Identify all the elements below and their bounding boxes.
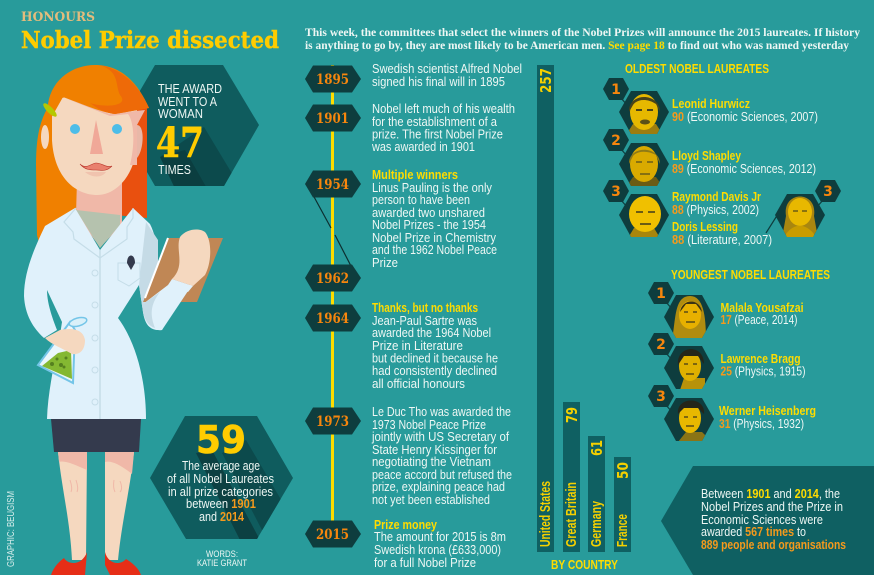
text: multiple winners: Prize bbox=[372, 256, 398, 270]
rank badges: 3 bbox=[656, 389, 666, 405]
bar: Great Britain bbox=[563, 402, 581, 552]
bar: Germany: 61 bbox=[588, 440, 606, 456]
rank badges: 2 bbox=[611, 133, 621, 149]
text: prize money: The amount for 2015 is 8m bbox=[374, 530, 506, 544]
text: thanks but no thanks: but declined it because he bbox=[372, 352, 498, 366]
text: 1973: State Henry Kissinger for bbox=[372, 443, 497, 457]
laureate 3 bbox=[619, 194, 669, 238]
text: 1973 bbox=[371, 405, 512, 507]
shoes bbox=[51, 552, 141, 575]
bar: France: 50 bbox=[614, 462, 632, 479]
year 1954: 1954 bbox=[316, 177, 349, 193]
text: 1901: prize. The first Nobel Prize bbox=[372, 128, 503, 142]
laureate 3 bbox=[664, 398, 714, 442]
bar: United States bbox=[537, 65, 555, 552]
text: prize money: Swedish krona (£633,000) bbox=[374, 543, 501, 557]
hand and forearm bbox=[143, 285, 192, 330]
text: thanks but no thanks: all official honours bbox=[372, 377, 465, 391]
callout: prize totals: 889 people and organisations bbox=[701, 538, 846, 552]
laureate text: 89 (Economic Sciences, 2012) bbox=[672, 162, 816, 176]
text: multiple winners: awarded two unshared bbox=[372, 206, 485, 220]
text: thanks but no thanks: Thanks, but no thanks bbox=[372, 301, 478, 315]
clipboard bbox=[143, 238, 223, 302]
year 1895 bbox=[305, 66, 361, 92]
text: 1895: signed his final will in 1895 bbox=[372, 75, 505, 89]
rank badges: 1 bbox=[611, 82, 621, 98]
text: 1973: negotiating the Vietnam bbox=[372, 455, 491, 469]
callout: award went to a woman 47 times: WENT TO A bbox=[158, 95, 218, 109]
laureate text: Lloyd Shapley bbox=[672, 149, 741, 163]
callout: average age 59: of all Nobel Laureates bbox=[167, 472, 274, 486]
bar: Great Britain: Great Britain bbox=[564, 482, 580, 547]
rank badges: 3 bbox=[611, 184, 621, 200]
callout: award went to a woman 47 times: WOMAN bbox=[158, 107, 203, 121]
text: 1973: jointly with US Secretary of bbox=[371, 430, 509, 444]
heading: OLDEST NOBEL LAUREATES bbox=[625, 61, 769, 76]
laureate text: 90 (Economic Sciences, 2007) bbox=[672, 110, 818, 124]
callout: average age 59: between 1901 bbox=[186, 497, 256, 511]
text: multiple winners: person to have been bbox=[372, 193, 470, 207]
laureate text: Werner Heisenberg bbox=[719, 404, 816, 418]
rank badges bbox=[648, 282, 674, 407]
callout: award went to a woman 47 times: TIMES bbox=[158, 163, 191, 177]
callout: award went to a woman 47 times: 47 bbox=[156, 119, 204, 167]
text: 1901: for the establishment of a bbox=[372, 115, 497, 129]
year 1962: 1962 bbox=[316, 271, 349, 287]
text: 1973: not yet been established bbox=[372, 493, 490, 507]
year 1973 bbox=[305, 408, 361, 434]
face bbox=[52, 90, 137, 195]
rank badges bbox=[603, 78, 841, 202]
skirt bbox=[51, 419, 141, 452]
section label: HONOURS bbox=[21, 10, 95, 25]
callout: prize totals: awarded 567 times to bbox=[701, 525, 806, 539]
text: 1895 bbox=[372, 62, 522, 89]
text: 1973: Le Duc Tho was awarded the bbox=[372, 405, 511, 419]
text: multiple winners: Nobel Prizes - the 1954 bbox=[372, 218, 486, 232]
text: thanks but no thanks: Jean-Paul Sartre was bbox=[372, 314, 477, 328]
callout: prize totals: Between 1901 and 2014, the bbox=[701, 487, 840, 501]
intro text: is anything to go by, they are most likely to be American men. See page 18 to find out who was named yesterday bbox=[305, 38, 849, 52]
text: 1901: Nobel left much of his wealth bbox=[372, 102, 515, 116]
laureate 1 bbox=[619, 91, 669, 135]
text: prize money: for a full Nobel Prize bbox=[374, 556, 476, 570]
text: 1973: 1973 Nobel Peace Prize bbox=[372, 418, 486, 432]
words credit: WORDS: bbox=[206, 549, 238, 559]
callout: average age 59: The average age bbox=[182, 459, 260, 473]
year 1954 bbox=[305, 170, 361, 198]
laureate text: 31 (Physics, 1932) bbox=[719, 417, 804, 431]
bar chart: by country bbox=[537, 65, 632, 572]
bar: Germany: Germany bbox=[589, 501, 605, 547]
laureate text: Raymond Davis Jr bbox=[672, 190, 761, 204]
eyes, nose, mouth bbox=[70, 124, 80, 134]
text: multiple winners: Nobel Prize in Chemistry bbox=[372, 231, 497, 245]
year 1962 bbox=[305, 264, 361, 292]
panel: oldest laureates bbox=[603, 61, 841, 247]
bar: United States: United States bbox=[538, 481, 554, 547]
legs bbox=[58, 452, 134, 560]
illustration: scientist woman bbox=[24, 65, 223, 575]
words credit bbox=[197, 549, 247, 568]
callout: award went to a woman 47 times bbox=[140, 65, 259, 186]
laureate text bbox=[672, 97, 818, 247]
neck bbox=[76, 180, 122, 247]
text: thanks but no thanks: had consistently declined bbox=[372, 364, 497, 378]
intro text bbox=[305, 25, 860, 52]
year 1964: 1964 bbox=[316, 311, 349, 327]
rank badges: 2 bbox=[656, 337, 666, 353]
title: Nobel Prize dissected bbox=[21, 27, 279, 54]
callout: prize totals bbox=[661, 466, 874, 575]
timeline bbox=[305, 65, 361, 548]
year 1973: 1973 bbox=[316, 414, 349, 430]
callout: average age 59: and 2014 bbox=[199, 510, 244, 524]
laureate text: 88 (Literature, 2007) bbox=[672, 233, 772, 247]
text: multiple winners: and the 1962 Nobel Peace bbox=[372, 243, 497, 257]
bar: Germany bbox=[588, 436, 606, 552]
text: 1895: Swedish scientist Alfred Nobel bbox=[372, 62, 522, 76]
heading: YOUNGEST NOBEL LAUREATES bbox=[671, 267, 830, 282]
laureate text: Leonid Hurwicz bbox=[672, 97, 750, 111]
chart label: BY COUNTRY bbox=[551, 557, 618, 572]
rank badges: 1 bbox=[656, 286, 666, 302]
text: multiple winners: Linus Pauling is the only bbox=[372, 181, 493, 195]
intro text: This week, the committees that select the winners of the Nobel Prizes will announce the 2015 laureates. If history bbox=[305, 25, 860, 39]
bar: Great Britain: 79 bbox=[563, 407, 581, 423]
text: 1901 bbox=[371, 102, 515, 154]
callout: average age 59 bbox=[150, 416, 293, 540]
laureate text: 17 (Peace, 2014) bbox=[720, 313, 798, 327]
callout: average age 59: in all prize categories bbox=[168, 485, 273, 499]
laureate text: 88 (Physics, 2002) bbox=[672, 203, 759, 217]
laureate text bbox=[719, 301, 816, 431]
text: thanks but no thanks bbox=[372, 301, 498, 391]
text: 1901: was awarded in 1901 bbox=[371, 140, 475, 154]
rank badges: 3 bbox=[823, 184, 833, 200]
bar: France bbox=[614, 457, 632, 552]
bar: United States: 257 bbox=[537, 68, 555, 93]
callout: prize totals: Nobel Prizes and the Prize in bbox=[701, 500, 843, 514]
text: 1973: prize, explaining peace had bbox=[372, 480, 505, 494]
year 1964 bbox=[305, 304, 361, 332]
text: prize money: Prize money bbox=[374, 518, 437, 532]
text: multiple winners: Multiple winners bbox=[372, 168, 458, 182]
text: prize money bbox=[374, 518, 506, 570]
callout: prize totals: Economic Sciences were bbox=[701, 513, 823, 527]
year 1901: 1901 bbox=[316, 111, 349, 127]
callout: award went to a woman 47 times: THE AWARD bbox=[158, 82, 222, 96]
year 2015 bbox=[305, 520, 361, 548]
year 1895: 1895 bbox=[316, 72, 349, 88]
hair top bbox=[48, 65, 149, 120]
laureate 1 bbox=[664, 295, 714, 340]
text: multiple winners bbox=[372, 168, 497, 270]
laureate 3b bbox=[775, 194, 825, 238]
text: thanks but no thanks: awarded the 1964 Nobel bbox=[372, 326, 491, 340]
laureate 2 bbox=[664, 346, 714, 390]
year 1901 bbox=[305, 104, 361, 132]
laureate 2 bbox=[619, 143, 669, 187]
laureate text: Lawrence Bragg bbox=[720, 352, 800, 366]
text: thanks but no thanks: Prize in Literature bbox=[372, 339, 463, 353]
panel: youngest laureates bbox=[648, 267, 830, 442]
year 2015: 2015 bbox=[316, 527, 349, 543]
laureate text: Malala Yousafzai bbox=[720, 301, 804, 315]
laureate text: 25 (Physics, 1915) bbox=[720, 364, 806, 378]
connector 1954 to 1962 bbox=[313, 195, 352, 268]
callout: average age 59: 59 bbox=[196, 418, 246, 462]
coat bbox=[24, 208, 175, 419]
text: 1973: peace accord but refused the bbox=[372, 468, 512, 482]
graphic credit: GRAPHIC: BEUGISM bbox=[6, 491, 17, 567]
words credit: KATIE GRANT bbox=[197, 558, 247, 568]
bar: France: France bbox=[615, 514, 631, 547]
flask and hand bbox=[38, 322, 75, 383]
laureate text: Doris Lessing bbox=[672, 220, 738, 234]
hair back bbox=[36, 90, 90, 292]
